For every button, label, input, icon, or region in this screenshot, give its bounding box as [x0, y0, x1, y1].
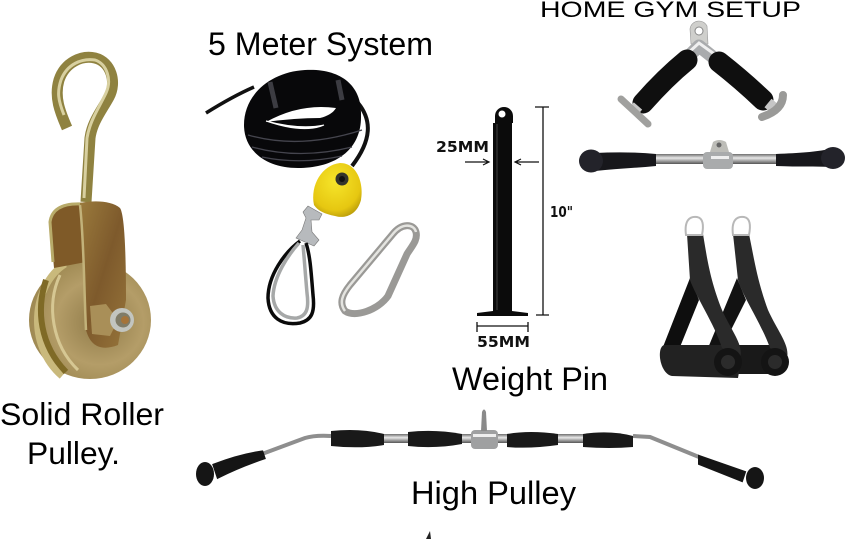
- right grip: [719, 62, 763, 100]
- steel ends: [632, 103, 774, 113]
- stray mark: [426, 531, 431, 539]
- label: solid roller pulley: Solid Roller: [0, 396, 164, 432]
- label: high pulley: High Pulley: [411, 475, 576, 511]
- yellow ball: [313, 163, 362, 217]
- center swivel: [471, 430, 498, 449]
- icon: v-bar handle: [621, 21, 783, 124]
- icon: straight bar: [579, 140, 845, 172]
- pulley front strap: [80, 201, 126, 348]
- silver ferrule: [296, 206, 322, 246]
- arrow: 25mm right: [515, 159, 539, 165]
- d-rings: [686, 217, 703, 235]
- left disc: [621, 99, 648, 124]
- pulley hook: [57, 57, 113, 202]
- heading: 5 meter system: 5 Meter System: [208, 26, 433, 62]
- arrow: 25mm left: [465, 159, 489, 165]
- center grips: [331, 430, 384, 447]
- weight pin body: [477, 107, 528, 316]
- icon: cable with yellow ball and loop: [206, 70, 368, 324]
- dimension label: 10 inch: 10": [550, 203, 573, 221]
- rear foam handle: [700, 345, 782, 374]
- icon: solid roller pulley: [29, 57, 151, 379]
- pulley wheel: [29, 261, 151, 379]
- cable coil: [244, 70, 361, 168]
- swivel tab: [690, 21, 708, 44]
- front straps: [687, 234, 741, 358]
- left grip: [643, 60, 687, 103]
- pulley nut: [90, 304, 118, 336]
- pulley back strap: [50, 204, 86, 268]
- dimension lines: [477, 107, 549, 332]
- front foam handle: [660, 345, 740, 378]
- right grip: [776, 149, 830, 167]
- label: solid roller pulley: Pulley.: [27, 435, 120, 471]
- chart: weight pin dimensions: [436, 107, 573, 351]
- center swivel: [703, 152, 733, 169]
- back straps: [661, 278, 699, 352]
- strap rollers: [714, 348, 742, 376]
- label: weight pin: Weight Pin: [452, 361, 608, 397]
- dimension label: 55mm: 55MM: [477, 333, 530, 351]
- steel elbow: [685, 46, 719, 62]
- label: solid roller pulley: [0, 396, 164, 471]
- end grips: [214, 452, 264, 477]
- icon: lat pulldown bar: [196, 410, 764, 489]
- wire loop: [268, 241, 314, 324]
- dimension label: 25mm: 25MM: [436, 138, 489, 156]
- cable tail: [206, 87, 254, 113]
- steel rod: [262, 436, 699, 457]
- right disc: [762, 95, 783, 117]
- icon: carabiner: [342, 226, 416, 314]
- left grip: [595, 152, 656, 171]
- icon: strap handles: [660, 217, 789, 378]
